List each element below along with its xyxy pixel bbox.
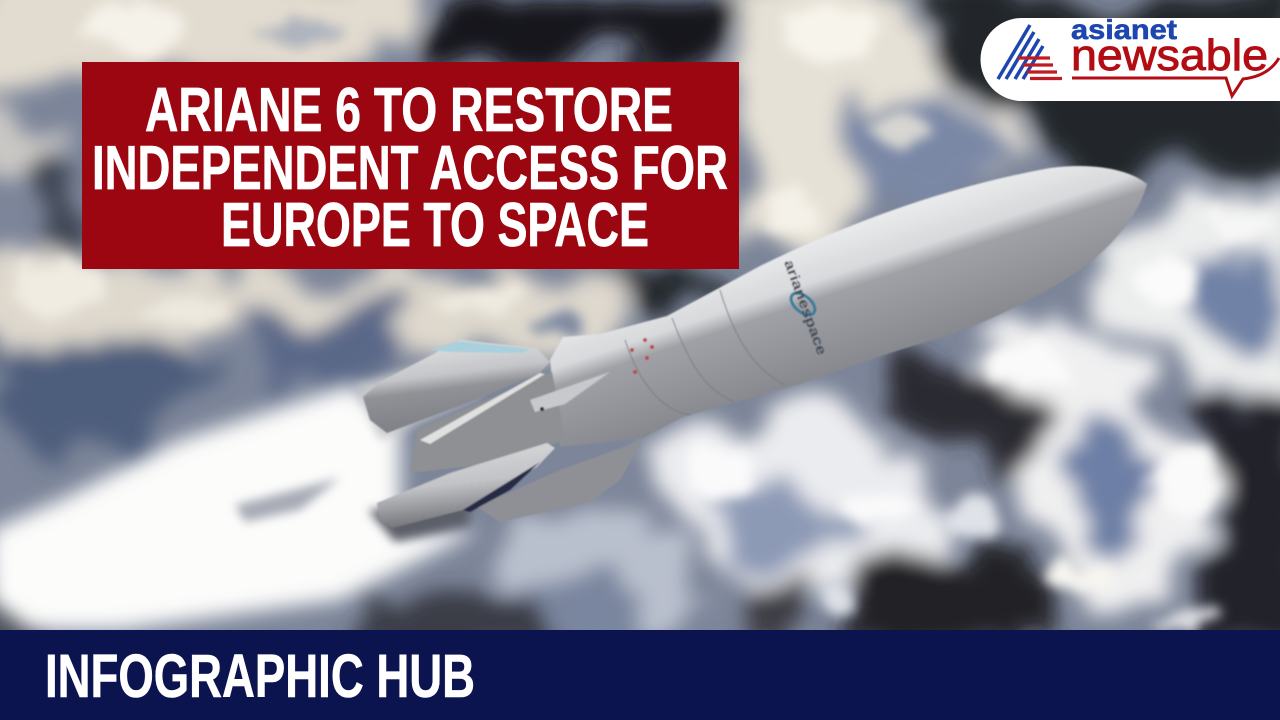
dark gaps in clouds	[420, 0, 740, 60]
arianespace logo: arianespace	[781, 258, 831, 357]
central engine section	[410, 372, 566, 473]
engine glow shadow	[355, 350, 480, 542]
logo: asianet newsable: asianet	[1071, 14, 1177, 45]
main stage and nose	[550, 166, 1147, 447]
stage rings	[625, 290, 785, 415]
fin	[477, 440, 643, 522]
exhaust plume	[0, 385, 480, 630]
logo: asianet newsable: newsable	[1071, 31, 1268, 80]
logo: asianet newsable	[980, 14, 1280, 101]
headline box: INDEPENDENT ACCESS FOR	[92, 134, 728, 203]
blue cloud shadows	[0, 345, 215, 460]
rocket	[355, 166, 1147, 542]
upper booster	[363, 340, 550, 433]
headline box	[82, 62, 739, 269]
headline box: EUROPE TO SPACE	[221, 191, 649, 260]
cream and white cloud tops	[0, 0, 430, 100]
footer band: INFOGRAPHIC HUB	[45, 642, 475, 710]
footer band	[0, 630, 1280, 720]
headline box: ARIANE 6 TO RESTORE	[145, 76, 673, 145]
lower booster	[377, 443, 555, 528]
icon: triangle mark	[998, 25, 1062, 79]
red markings	[630, 338, 654, 374]
